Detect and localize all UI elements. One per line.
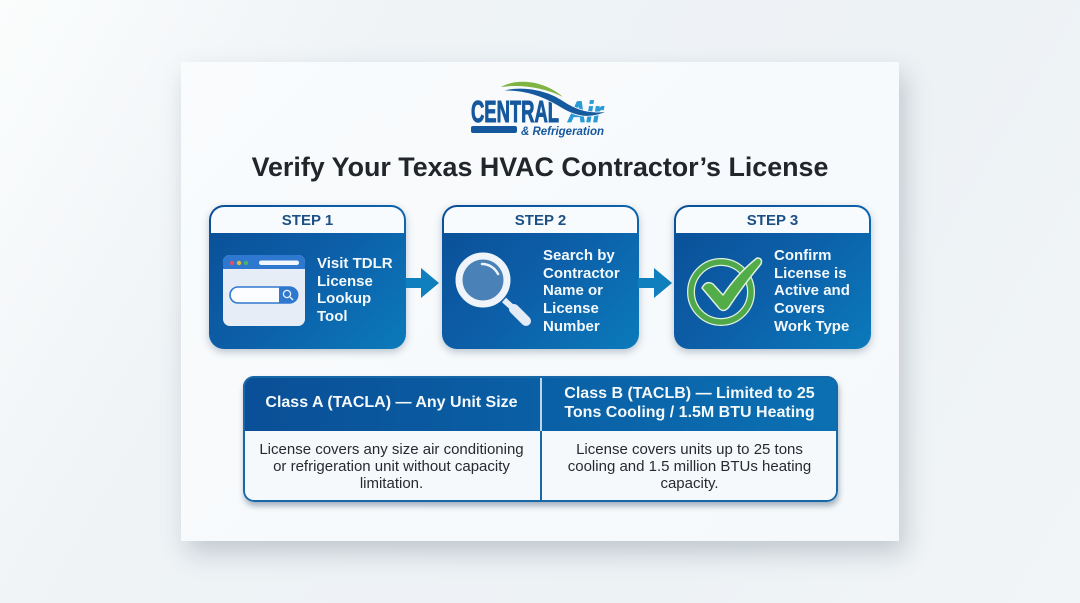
class A heading: Class A (TACLA) — Any Unit Size <box>265 394 518 411</box>
step 2 text: Search by <box>543 247 615 264</box>
step 2 heading <box>444 207 637 233</box>
logo: Central Air & Refrigeration: CENTRAL <box>471 94 559 129</box>
table header band <box>243 376 838 431</box>
step 1 text: Visit TDLR <box>317 255 393 272</box>
table column divider <box>540 431 542 502</box>
step 1 heading: STEP 1 <box>282 212 333 229</box>
step 2 text: Name or <box>543 282 603 299</box>
class B description: License covers units up to 25 tons <box>576 441 803 458</box>
step 1 text: License <box>317 273 373 290</box>
step 3 text: Confirm <box>774 247 832 264</box>
step 2 text: Contractor <box>543 265 620 282</box>
step 2 text <box>543 247 620 335</box>
logo: Central Air & Refrigeration: & Refrigeration <box>521 124 604 138</box>
step 2 heading: STEP 2 <box>515 212 566 229</box>
class A description: limitation. <box>360 475 423 492</box>
step 3 text: Covers <box>774 300 825 317</box>
class A description: License covers any size air conditioning <box>259 441 524 458</box>
class B description <box>568 441 811 492</box>
step 3 card <box>674 205 871 349</box>
class B heading <box>564 385 815 421</box>
class A description <box>259 441 524 492</box>
step 1 text <box>317 255 393 325</box>
step 3 text: Active and <box>774 282 850 299</box>
white sheet panel <box>181 62 899 541</box>
logo: Central Air & Refrigeration: Air <box>567 96 605 129</box>
icon: browser search window <box>223 255 305 326</box>
icon: magnifying glass <box>456 252 531 326</box>
class B description: capacity. <box>660 475 719 492</box>
class A description: or refrigeration unit without capacity <box>273 458 510 475</box>
step 2 text: Number <box>543 318 600 335</box>
arrow: step 2 to step 3 <box>638 268 672 298</box>
step 1 text: Lookup <box>317 290 371 307</box>
class B heading: Tons Cooling / 1.5M BTU Heating <box>564 404 815 421</box>
step 3 heading <box>676 207 869 233</box>
table outline <box>243 376 838 502</box>
step 3 text: License is <box>774 265 847 282</box>
class B heading: Class B (TACLB) — Limited to 25 <box>564 385 815 402</box>
table header divider <box>540 378 542 431</box>
step 2 text: License <box>543 300 599 317</box>
step 1 heading <box>211 207 404 233</box>
icon: green check mark in circle <box>687 257 762 326</box>
step 3 heading: STEP 3 <box>747 212 798 229</box>
step 2 card <box>442 205 639 349</box>
step 3 text: Work Type <box>774 318 849 335</box>
class B description: cooling and 1.5 million BTUs heating <box>568 458 811 475</box>
title: Verify Your Texas HVAC Contractor’s License <box>252 152 828 182</box>
logo: Central Air & Refrigeration <box>471 82 605 138</box>
step 3 text <box>774 247 850 335</box>
arrow: step 1 to step 2 <box>406 268 439 298</box>
step 1 card <box>209 205 406 349</box>
step 1 text: Tool <box>317 308 348 325</box>
comparison table: license classes <box>243 376 838 502</box>
